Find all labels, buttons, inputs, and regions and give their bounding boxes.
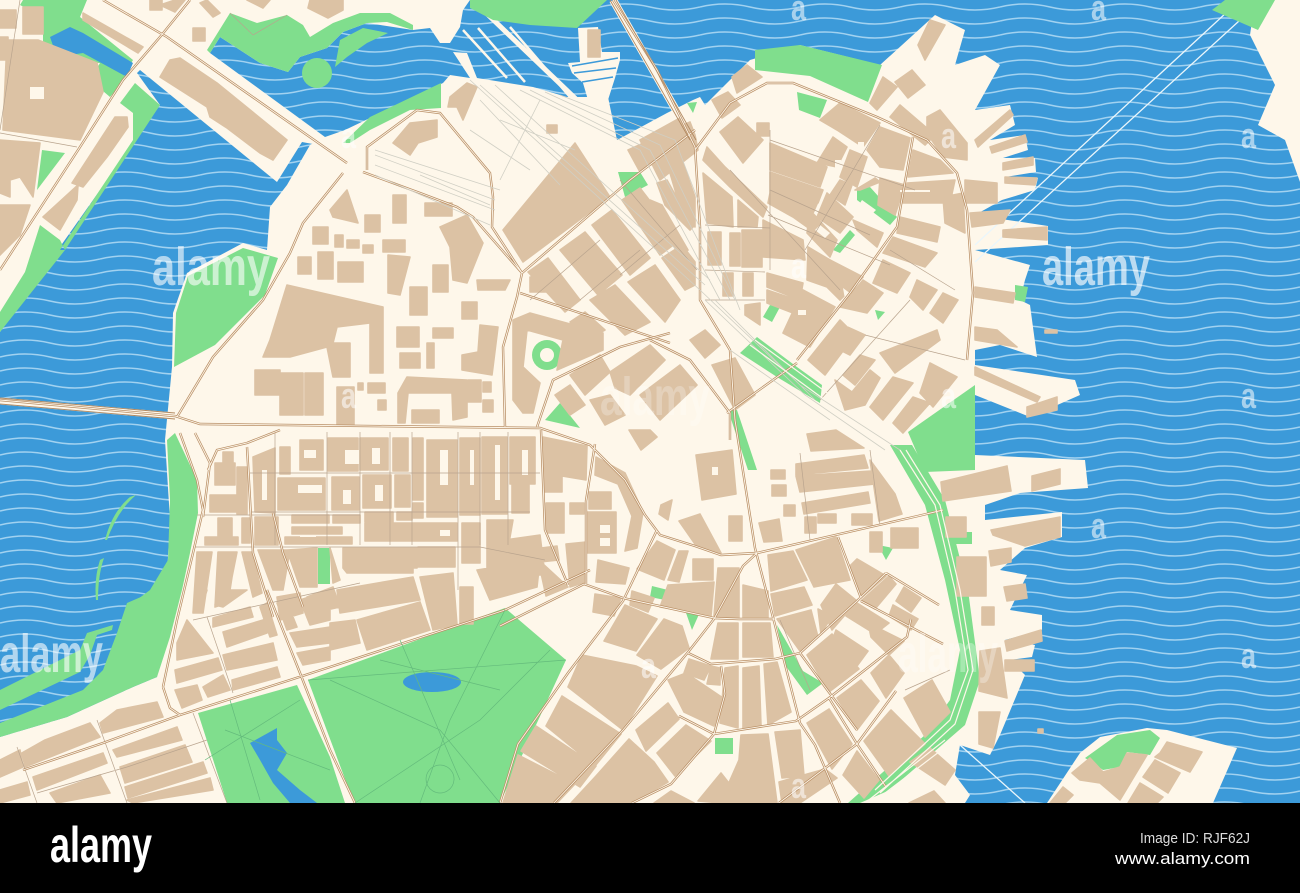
small watermark letters: a [641, 645, 657, 686]
small watermark letters: a [791, 245, 807, 286]
rail yard lines [375, 80, 900, 450]
watermark lower left: alamy [0, 624, 103, 684]
thin bridge lines [960, 0, 1262, 803]
small watermark letters: a [1091, 505, 1107, 546]
greenway lines [750, 340, 973, 803]
pond: Common frog pond [403, 672, 461, 692]
park: greenway north [740, 337, 822, 403]
stadium [532, 340, 562, 370]
small watermark letters: a [1241, 635, 1257, 676]
watermark lower centre: alamy [898, 624, 998, 684]
small watermark letters [341, 0, 1257, 806]
park: riverside crescent [0, 625, 113, 710]
road network [0, 0, 973, 803]
cream courtyards in blocks [30, 87, 930, 546]
park: north end green [755, 45, 882, 102]
park: west shore lawn [174, 248, 278, 367]
park: Public Garden [198, 685, 345, 803]
small watermark letters: a [941, 375, 957, 416]
park: Esplanade north [130, 433, 198, 605]
land: central peninsula [0, 15, 1088, 803]
watermark left: alamy [152, 237, 270, 297]
park: crescent isles [96, 495, 136, 600]
main roads outer [0, 0, 973, 803]
park: Cambridge edge [0, 0, 160, 332]
park: greenway band south [848, 445, 980, 803]
watermark centre: alamy [600, 367, 710, 427]
land: Cambridge shore and north bank with wharf strip [0, 0, 470, 332]
pond: Cambridge basin [50, 27, 133, 77]
footer bar [0, 803, 1300, 893]
small watermark letters: a [941, 115, 957, 156]
footer url: www.alamy.com [1114, 849, 1250, 868]
land: top right shore [1250, 0, 1300, 182]
pond: lagoon in Public Garden [250, 728, 317, 803]
park: top strip [470, 0, 607, 28]
ponds [50, 27, 461, 803]
park: island [1085, 730, 1160, 770]
land: pier at top [568, 27, 620, 100]
bridge causeways [463, 0, 693, 140]
pier stripes [572, 58, 618, 82]
stadium ring [540, 348, 554, 362]
park: waterfront [908, 385, 975, 472]
park: crescent [335, 28, 388, 67]
small watermark letters: a [341, 115, 357, 156]
footer image id: Image ID: RJF62J [1140, 830, 1250, 847]
small watermark letters: a [1241, 115, 1257, 156]
footer logo: alamy [50, 817, 152, 873]
watermark right: alamy [1042, 237, 1150, 297]
common paths [205, 610, 566, 803]
left bridge deck [0, 401, 175, 416]
small watermark letters: a [1241, 375, 1257, 416]
causeway road lines [0, 0, 696, 419]
park: pond circle [302, 58, 332, 88]
park: Esplanade south [0, 590, 182, 737]
park: river strip [343, 83, 441, 143]
minor street lines [0, 0, 965, 803]
main roads inner [0, 0, 973, 803]
small watermark letters: a [341, 375, 357, 416]
park: Boston Common [308, 608, 566, 803]
small watermark letters: a [791, 765, 807, 806]
park: small squares [318, 92, 1028, 754]
land: island lower right [1047, 728, 1237, 803]
park: top right strip [1212, 0, 1275, 30]
park: north bank [207, 13, 413, 72]
